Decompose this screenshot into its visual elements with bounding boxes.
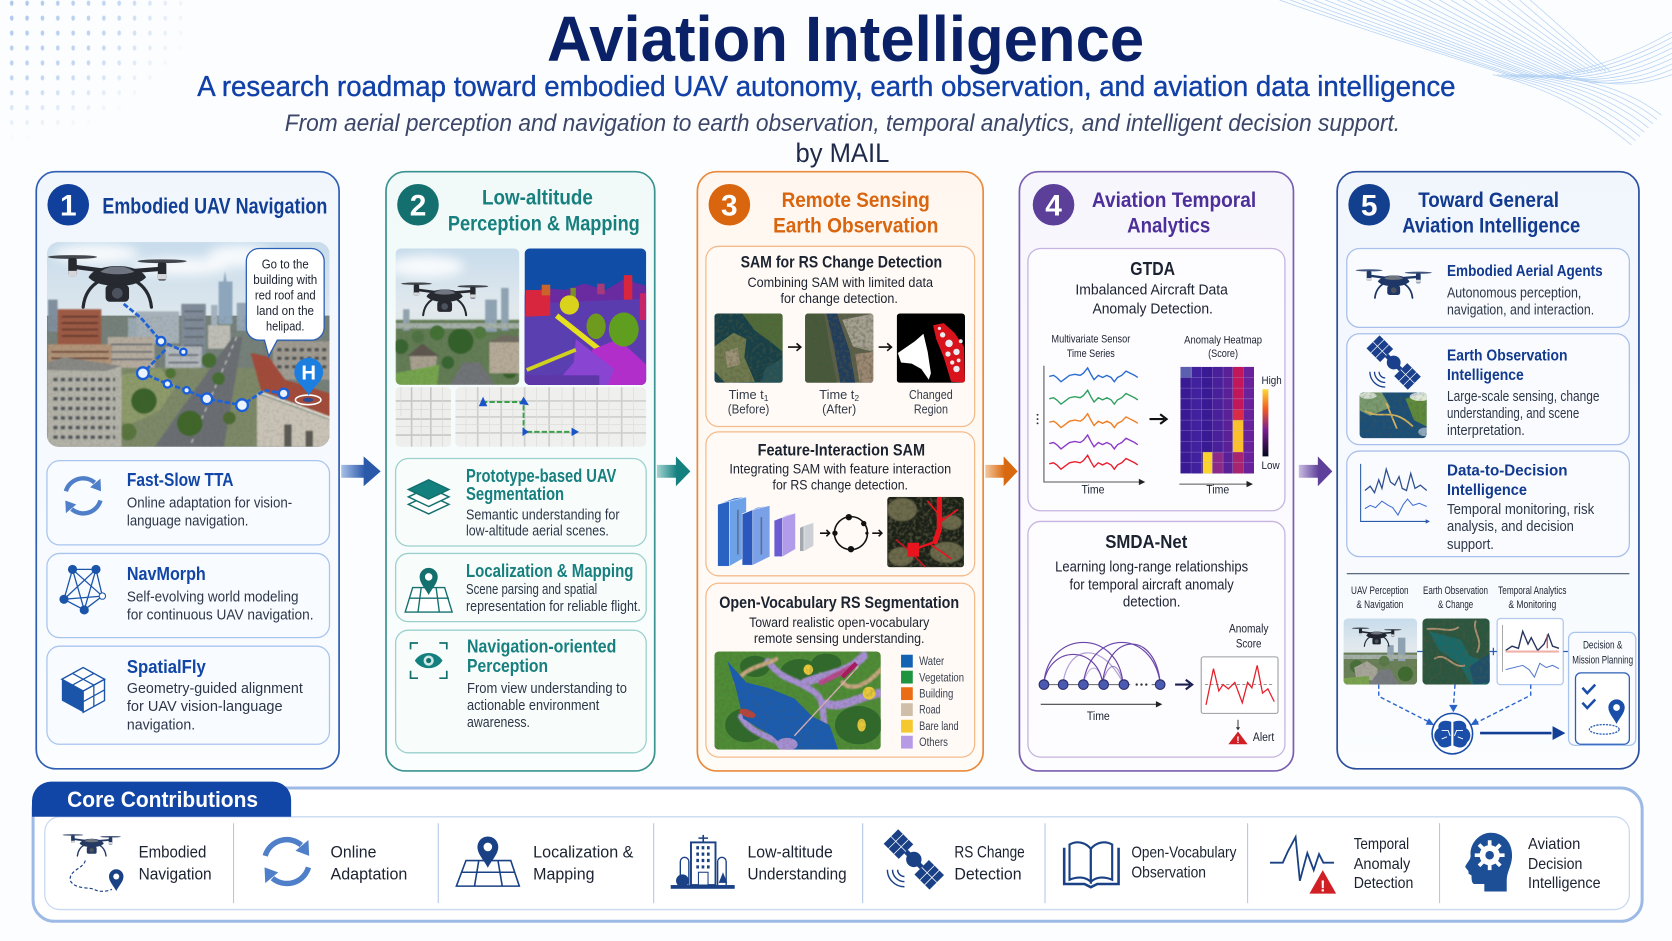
aerial city scene with drone route: [47, 242, 331, 447]
card: Data-to-Decision Intelligence: support.: [1447, 537, 1494, 553]
card: Navigation-oriented Perception: Navigation-oriented: [467, 637, 616, 657]
helipad pin: [294, 358, 323, 396]
arrow: panel 4 to panel 5: [1299, 456, 1332, 486]
speech bubble: red roof and: [255, 288, 316, 303]
icon: network graph: [60, 565, 106, 614]
card: Data-to-Decision Intelligence: Data-to-Decision: [1447, 463, 1567, 480]
item: Online Adaptation: Online: [331, 842, 376, 861]
arrow: panel 1 to panel 2: [341, 456, 381, 486]
panel 4 heading: [1092, 188, 1256, 237]
interaction loop: [820, 514, 882, 552]
speech bubble: building with: [253, 272, 317, 287]
legend: Building: [919, 687, 953, 700]
item: Online Adaptation: Adaptation: [331, 865, 407, 884]
panel 5 heading: [1402, 188, 1580, 237]
tab heading: Core Contributions: [67, 787, 258, 812]
card: Navigation-oriented Perception: actionable environment: [467, 697, 600, 714]
icon: pulse with warning: !: [1320, 878, 1325, 895]
card: SpatialFly: navigation.: [127, 716, 195, 733]
image captions: (Before): [728, 402, 769, 417]
icon: drone: [1356, 269, 1432, 298]
icon: line chart: [1361, 464, 1430, 524]
image captions: Region: [914, 402, 948, 417]
badge 1: [47, 184, 89, 226]
panel 3: Remote Sensing Earth Observation: [697, 172, 983, 771]
card: SpatialFly: SpatialFly: [127, 657, 206, 677]
image captions: 1: [764, 393, 769, 403]
title: Aviation Intelligence: [547, 3, 1144, 75]
card: Open-Vocabulary RS Segmentation: Open-Vocabulary RS Segmentation: [719, 593, 959, 612]
legend: Others: [919, 736, 948, 749]
item: Localization & Mapping: [456, 837, 633, 886]
badge 4: 4: [1045, 189, 1062, 222]
thumbnail: city with drone: [1344, 618, 1417, 685]
image captions: 2: [854, 393, 859, 403]
decision and mission planning box: [1569, 632, 1636, 745]
card: Prototype-based UAV Segmentation: low-altitude aerial scenes.: [466, 523, 609, 539]
card: SAM for RS Change Detection: Combining SAM with limited data: [747, 274, 933, 290]
card: Data-to-Decision Intelligence: Intelligence: [1447, 482, 1527, 499]
change mask: [897, 313, 965, 383]
anomaly heatmap: Time: [1206, 484, 1229, 497]
item: Aviation Decision Intelligence: Aviation: [1528, 836, 1580, 853]
arrow: series to heatmap: [1149, 414, 1167, 424]
land-cover map: [714, 652, 882, 751]
thumbnail: monitoring chart: [1497, 618, 1563, 685]
alert: !: [1236, 735, 1240, 746]
arrow: brain to decision: [1480, 726, 1565, 740]
panel 2: Low-altitude Perception & Mapping: [386, 172, 655, 771]
fusion diagram: & Change: [1438, 599, 1473, 611]
item: Embodied Navigation: Navigation: [139, 865, 212, 884]
semantic segmentation image: [525, 248, 646, 385]
item: RS Change Detection: Detection: [954, 865, 1022, 884]
aerial neighbourhood photo: [389, 248, 519, 385]
dashed flows into brain: [1379, 685, 1531, 723]
card: Navigation-oriented Perception: awareness.: [467, 714, 530, 731]
card: Localization & Mapping: [396, 553, 646, 622]
image captions: Time t: [729, 387, 764, 402]
card: SMDA-Net: for temporal aircraft anomaly: [1070, 577, 1234, 594]
icon: satellite: [1367, 335, 1421, 390]
icon: refresh arrows: [65, 478, 101, 513]
legend: Water: [919, 655, 944, 668]
feature encoder blocks: [718, 497, 814, 566]
card: Prototype-based UAV Segmentation: Segmentation: [466, 484, 564, 504]
badge 4: [1033, 184, 1074, 226]
street map with route: [396, 387, 646, 447]
card: GTDA: (Score): [1208, 348, 1238, 360]
card: Earth Observation Intelligence: Large-scale sensing, change: [1447, 389, 1599, 405]
card: Open-Vocabulary RS Segmentation: [706, 583, 975, 757]
panel 1: Embodied UAV Navigation: [36, 172, 339, 769]
card: SMDA-Net: [1028, 521, 1285, 757]
card: Feature-Interaction SAM: Integrating SAM with feature interaction: [729, 460, 951, 476]
legend: Vegetation: [919, 671, 964, 684]
card: GTDA: GTDA: [1130, 258, 1175, 279]
subtitle: A research roadmap toward embodied UAV autonomy, earth observation, and aviation data intelligence: [197, 71, 1456, 103]
panel 5: Toward General Aviation Intelligence: [1337, 172, 1639, 769]
card: GTDA: Multivariate Sensor: [1051, 333, 1131, 345]
image captions: [728, 387, 953, 417]
item: Aviation Decision Intelligence: Intelligence: [1528, 875, 1601, 892]
card: Fast-Slow TTA: Online adaptation for vision-: [127, 495, 292, 512]
icon: drone with path: [63, 834, 123, 891]
card: Data-to-Decision Intelligence: analysis, and decision: [1447, 519, 1574, 535]
segmentation result: [887, 497, 964, 567]
card: Earth Observation Intelligence: Intelligence: [1447, 367, 1524, 384]
anomaly score chart: Anomaly: [1229, 622, 1269, 635]
card: Fast-Slow TTA: [47, 461, 329, 545]
icon: brain: [1432, 713, 1473, 754]
card: NavMorph: for continuous UAV navigation.: [127, 607, 314, 624]
panel 4 heading: Aviation Temporal: [1092, 188, 1256, 212]
card: Localization & Mapping: representation for reliable flight.: [466, 599, 641, 615]
fusion diagram: UAV Perception: [1351, 585, 1409, 597]
card: GTDA: [1028, 248, 1285, 511]
panel: core contributions: [32, 782, 1642, 921]
arrow: panel 3 to panel 4: [985, 456, 1018, 486]
arrow: panel 2 to panel 3: [657, 456, 690, 486]
icon: eye in brackets: [411, 643, 447, 678]
temporal attention arcs: Time: [1087, 710, 1110, 723]
item: Aviation Decision Intelligence: Decision: [1528, 856, 1582, 873]
card: Prototype-based UAV Segmentation: Prototype-based UAV: [466, 466, 616, 486]
item: Aviation Decision Intelligence: [1465, 833, 1601, 892]
speech bubble: helipad.: [266, 319, 304, 334]
item: Temporal Anomaly Detection: [1270, 836, 1413, 895]
icon: pin on map: [456, 837, 519, 886]
anomaly heatmap: High: [1261, 375, 1282, 387]
tab heading: [32, 782, 291, 817]
card: GTDA: Anomaly Heatmap: [1184, 334, 1262, 346]
card: SMDA-Net: Learning long-range relationships: [1055, 559, 1248, 576]
panel 2 heading: Perception & Mapping: [448, 212, 640, 235]
item: Embodied Navigation: Embodied: [139, 842, 206, 861]
card: NavMorph: [47, 553, 329, 638]
card: Earth Observation Intelligence: understanding, and scene: [1447, 406, 1579, 422]
alert: Alert: [1253, 731, 1275, 744]
card: SpatialFly: Geometry-guided alignment: [127, 680, 304, 697]
connectors between thumbnails: [1417, 648, 1569, 655]
panel 4 heading: Analytics: [1127, 213, 1210, 237]
anomaly score chart: Score: [1236, 637, 1261, 650]
icon: layers: [408, 480, 449, 514]
fusion diagram: & Monitoring: [1508, 599, 1556, 611]
card: NavMorph: Self-evolving world modeling: [127, 588, 299, 605]
fusion diagram: & Navigation: [1356, 599, 1403, 611]
fusion diagram: [1344, 585, 1636, 754]
panel 3 heading: Remote Sensing: [782, 188, 930, 212]
item: Open-Vocabulary Observation: Open-Vocabulary: [1131, 844, 1237, 861]
badge 2: 2: [410, 189, 426, 222]
card: SAM for RS Change Detection: SAM for RS Change Detection: [741, 253, 942, 272]
card: SAM for RS Change Detection: [706, 246, 975, 427]
card: Earth Observation Intelligence: Earth Observation: [1447, 347, 1567, 364]
item: Localization & Mapping: Mapping: [533, 865, 594, 884]
card: Fast-Slow TTA: Fast-Slow TTA: [127, 470, 234, 490]
card: SMDA-Net: detection.: [1123, 594, 1180, 611]
image captions: (After): [822, 402, 856, 417]
thumbnail: satellite coast: [1422, 618, 1491, 685]
icon: head with gear: [1465, 833, 1512, 891]
card: Fast-Slow TTA: language navigation.: [127, 513, 248, 530]
card: SAM for RS Change Detection: for change detection.: [781, 290, 898, 306]
item: Embodied Navigation: [63, 834, 212, 891]
navigation route: [124, 304, 288, 411]
card: Embodied Aerial Agents: [1347, 248, 1629, 327]
item: Online Adaptation: [265, 840, 407, 884]
item: Temporal Anomaly Detection: Anomaly: [1354, 856, 1410, 873]
badge 5: 5: [1361, 189, 1377, 222]
badge 3: 3: [721, 189, 738, 222]
decision and mission planning box: Decision &: [1583, 639, 1622, 651]
anomaly score chart: [1201, 622, 1278, 713]
drone: [48, 255, 187, 307]
panel 3 heading: [773, 188, 938, 237]
anomaly heatmap: [1179, 367, 1282, 497]
card: Localization & Mapping: Scene parsing and spatial: [466, 582, 597, 598]
card: SMDA-Net: SMDA-Net: [1105, 531, 1187, 552]
card: Localization & Mapping: Localization & Mapping: [466, 561, 633, 581]
card: Navigation-oriented Perception: Perception: [467, 656, 548, 676]
panel 5 heading: Toward General: [1418, 188, 1559, 212]
fusion diagram: Temporal Analytics: [1498, 585, 1566, 597]
speech bubble: [246, 248, 324, 356]
card: Feature-Interaction SAM: [706, 432, 975, 576]
panel 5 heading: Aviation Intelligence: [1402, 213, 1580, 237]
satellite image: after: [805, 313, 873, 383]
tagline: From aerial perception and navigation to earth observation, temporal analytics, and intelligent decision support.: [285, 110, 1400, 137]
background dot pattern: [10, 0, 182, 125]
satellite image: before: [714, 313, 783, 383]
arrow: graph to score: [1175, 680, 1192, 689]
item: Low-altitude Understanding: Low-altitude: [747, 842, 833, 861]
card: GTDA: Time Series: [1067, 348, 1115, 360]
panel 1 heading: Embodied UAV Navigation: [102, 193, 327, 218]
item: Temporal Anomaly Detection: Temporal: [1354, 836, 1409, 853]
legend: [901, 655, 964, 749]
card: Open-Vocabulary RS Segmentation: Toward realistic open-vocabulary: [749, 614, 929, 630]
item: RS Change Detection: [884, 829, 1025, 890]
helipad pin: H: [301, 363, 316, 385]
panel 4: Aviation Temporal Analytics: [1019, 172, 1293, 771]
decision and mission planning box: Mission Planning: [1572, 654, 1633, 666]
card: Prototype-based UAV Segmentation: [396, 459, 646, 546]
badge 1: 1: [60, 189, 77, 222]
image captions: Time t: [819, 387, 854, 402]
panel 2 heading: [448, 187, 640, 235]
card: Prototype-based UAV Segmentation: Semantic understanding for: [466, 507, 620, 523]
card: Embodied Aerial Agents: Autonomous perception,: [1447, 286, 1581, 302]
icon: open book: [1064, 842, 1119, 887]
card: Earth Observation Intelligence: interpretation.: [1447, 423, 1525, 439]
card: NavMorph: NavMorph: [127, 564, 206, 584]
badge 5: [1348, 184, 1390, 226]
author line: by MAIL: [795, 138, 889, 168]
icon: cube: [62, 668, 105, 712]
legend: Bare land: [919, 720, 959, 733]
item: Temporal Anomaly Detection: Detection: [1354, 875, 1413, 892]
card: GTDA: Anomaly Detection.: [1092, 300, 1213, 317]
multivariate time-series chart: Time: [1082, 484, 1104, 497]
item: Low-altitude Understanding: [671, 835, 847, 889]
panel 2 heading: Low-altitude: [482, 187, 593, 210]
card: Navigation-oriented Perception: From view understanding to: [467, 680, 627, 697]
alert: [1228, 720, 1275, 746]
card: Feature-Interaction SAM: for RS change detection.: [773, 476, 908, 492]
card: GTDA: Imbalanced Aircraft Data: [1075, 281, 1229, 298]
icon: map pin on grid: [405, 568, 452, 612]
card: Open-Vocabulary RS Segmentation: remote sensing understanding.: [754, 630, 925, 646]
icon: satellite: [884, 829, 944, 890]
card: SpatialFly: for UAV vision-language: [127, 698, 283, 715]
card: Embodied Aerial Agents: Embodied Aerial Agents: [1447, 263, 1603, 280]
icon: pulse with warning: [1270, 837, 1336, 895]
earth image: [1360, 392, 1431, 438]
item: Open-Vocabulary Observation: Observation: [1131, 865, 1206, 882]
badge 2: [397, 184, 439, 226]
fusion diagram: Earth Observation: [1423, 585, 1488, 597]
multivariate time-series chart: [1037, 366, 1145, 497]
card: Feature-Interaction SAM: Feature-Interaction SAM: [758, 440, 925, 459]
badge 3: [709, 184, 750, 226]
anomaly heatmap: Low: [1261, 460, 1280, 472]
card: Earth Observation Intelligence: [1347, 334, 1629, 445]
card: Navigation-oriented Perception: [396, 630, 646, 753]
item: RS Change Detection: RS Change: [954, 842, 1025, 861]
item: Open-Vocabulary Observation: [1064, 842, 1237, 887]
panel 3 heading: Earth Observation: [773, 213, 938, 237]
icon: buildings: [671, 835, 735, 889]
card: Data-to-Decision Intelligence: Temporal monitoring, risk: [1447, 502, 1595, 518]
temporal attention arcs: [1039, 642, 1165, 723]
background wave lines: [1280, 0, 1672, 145]
card: Embodied Aerial Agents: navigation, and interaction.: [1447, 303, 1594, 319]
item: Low-altitude Understanding: Understanding: [747, 865, 847, 884]
icon: refresh arrows: [265, 840, 309, 884]
card: Data-to-Decision Intelligence: [1347, 451, 1629, 557]
item: Localization & Mapping: Localization &: [533, 842, 633, 861]
legend: Road: [919, 703, 940, 716]
speech bubble: Go to the: [262, 257, 309, 272]
image captions: Changed: [909, 387, 953, 402]
speech bubble: land on the: [256, 303, 314, 318]
card: SpatialFly: [47, 646, 329, 744]
change detection arrows: [788, 343, 891, 351]
